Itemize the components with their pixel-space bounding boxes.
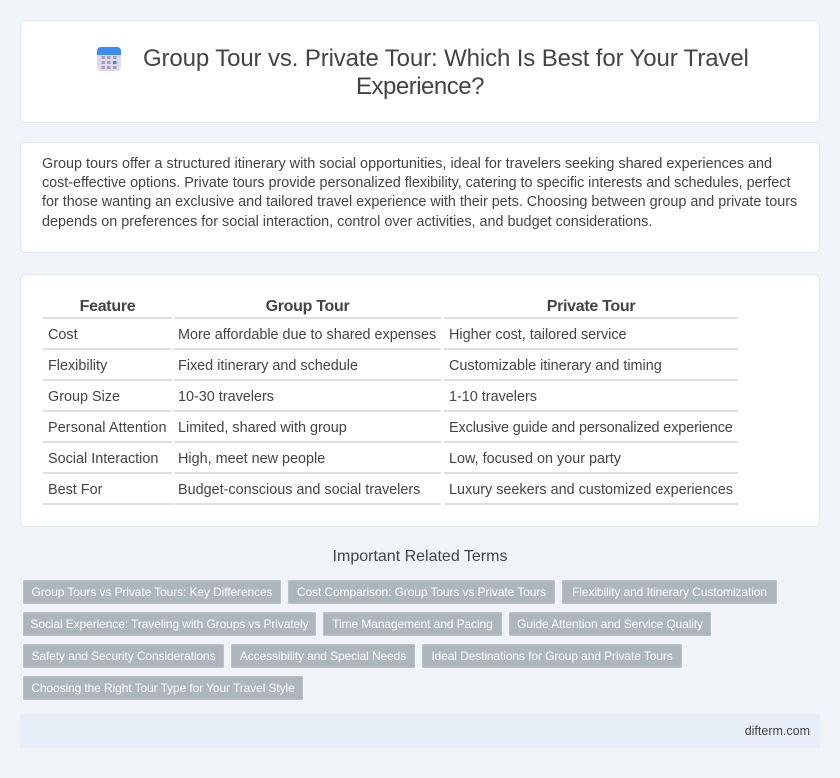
row: best for: Budget-conscious and social travelers bbox=[178, 482, 420, 498]
row: social interaction bbox=[48, 451, 621, 467]
row: best for: Best For bbox=[48, 482, 102, 498]
title: Experience? bbox=[356, 73, 484, 100]
comparison table bbox=[43, 298, 738, 505]
table header bbox=[80, 298, 636, 315]
row: cost: Cost bbox=[48, 327, 78, 343]
row: cost bbox=[48, 327, 627, 343]
icon: calendar bbox=[97, 47, 121, 71]
related terms tags bbox=[23, 580, 777, 700]
row: social interaction: High, meet new people bbox=[178, 451, 325, 467]
related terms tags: Ideal Destinations for Group and Private Tours bbox=[431, 649, 673, 663]
row: group size: Group Size bbox=[48, 389, 120, 405]
row: flexibility: Customizable itinerary and timing bbox=[449, 358, 662, 374]
title: Group Tour vs. Private Tour: Which Is Best for Your Travel bbox=[143, 45, 749, 72]
row: group size: 1-10 travelers bbox=[449, 389, 537, 405]
table header: Private Tour bbox=[547, 298, 635, 315]
intro text bbox=[42, 156, 797, 230]
related terms heading: Important Related Terms bbox=[333, 548, 507, 565]
panel: title header bbox=[20, 20, 820, 123]
row: personal attention bbox=[48, 420, 733, 436]
panel: introduction bbox=[20, 142, 820, 253]
row: social interaction: Social Interaction bbox=[48, 451, 158, 467]
row: cost: More affordable due to shared expenses bbox=[178, 327, 436, 343]
table header: Group Tour bbox=[266, 298, 349, 315]
intro text: depends on preferences for social interaction, control over activities, and budget considerations. bbox=[42, 214, 652, 230]
row: best for bbox=[48, 482, 733, 498]
related terms tags: Cost Comparison: Group Tours vs Private Tours bbox=[297, 585, 546, 599]
row: group size bbox=[48, 389, 537, 405]
intro text: for those wanting an exclusive and tailored travel experience with their pets. Choosing between group and private tours bbox=[42, 194, 797, 210]
related terms tags: Choosing the Right Tour Type for Your Travel Style bbox=[31, 681, 295, 695]
row: flexibility bbox=[48, 358, 662, 374]
site name: difterm.com bbox=[745, 724, 810, 738]
related terms tags: Social Experience: Traveling with Groups vs Privately bbox=[30, 617, 309, 631]
table header: Feature bbox=[80, 298, 135, 315]
related terms tags: Flexibility and Itinerary Customization bbox=[572, 585, 767, 599]
row: social interaction: Low, focused on your party bbox=[449, 451, 621, 467]
row: cost: Higher cost, tailored service bbox=[449, 327, 627, 343]
row: personal attention: Exclusive guide and personalized experience bbox=[449, 420, 733, 436]
related terms tags: Accessibility and Special Needs bbox=[240, 649, 406, 663]
row: personal attention: Personal Attention bbox=[48, 420, 167, 436]
title bbox=[143, 45, 749, 100]
row: group size: 10-30 travelers bbox=[178, 389, 274, 405]
row: flexibility: Flexibility bbox=[48, 358, 107, 374]
row: personal attention: Limited, shared with group bbox=[178, 420, 347, 436]
related terms tags: Guide Attention and Service Quality bbox=[517, 617, 703, 631]
related terms tags: Group Tours vs Private Tours: Key Differences bbox=[32, 585, 272, 599]
row: best for: Luxury seekers and customized experiences bbox=[449, 482, 733, 498]
intro text: Group tours offer a structured itinerary with social opportunities, ideal for travelers seeking shared experiences and bbox=[42, 156, 772, 172]
footer bbox=[20, 714, 820, 748]
panel: comparison table bbox=[20, 274, 820, 527]
related terms tags: Time Management and Pacing bbox=[332, 617, 493, 631]
row: flexibility: Fixed itinerary and schedule bbox=[178, 358, 358, 374]
related terms tags: Safety and Security Considerations bbox=[31, 649, 216, 663]
intro text: cost-effective options. Private tours provide personalized flexibility, catering to specific interests and schedules, perfect bbox=[42, 175, 790, 191]
